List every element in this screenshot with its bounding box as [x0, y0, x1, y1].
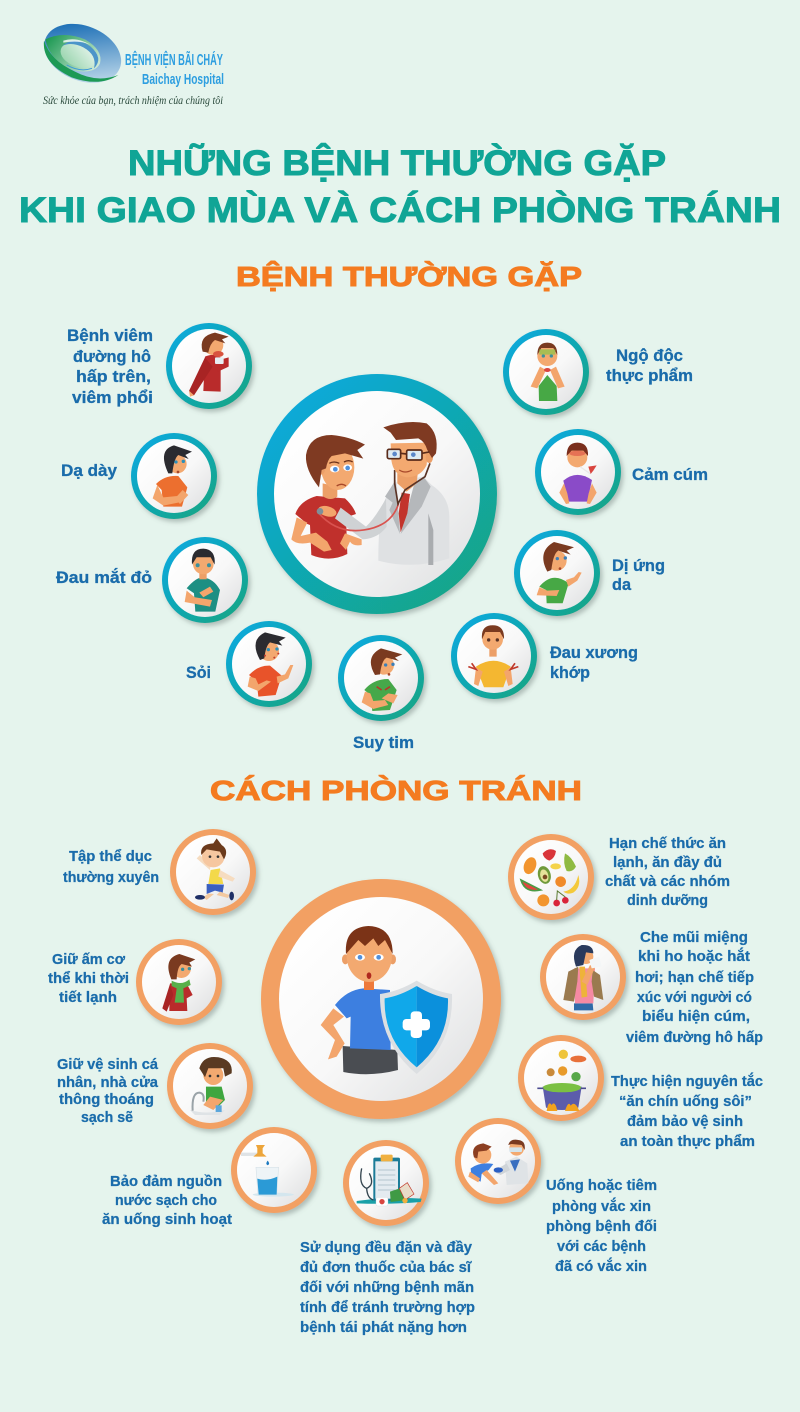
badge: heart failure — [338, 635, 424, 721]
label: vaccination: với các bệnh — [557, 1238, 646, 1255]
label: clean water: Bảo đảm nguồn — [110, 1173, 222, 1190]
label: cooked food: an toàn thực phẩm — [620, 1133, 755, 1150]
label: joint pain — [550, 643, 638, 682]
label: respiratory infection: viêm phổi — [72, 388, 153, 407]
label: healthy food: dinh dưỡng — [627, 892, 708, 909]
label: flu: Cảm cúm — [632, 465, 708, 484]
label: hygiene — [57, 1056, 159, 1126]
label: hygiene: sạch sẽ — [81, 1109, 133, 1126]
label: keep warm: tiết lạnh — [59, 989, 117, 1006]
label: cover mouth: viêm đường hô hấp — [626, 1029, 763, 1046]
label: skin allergy: Dị ứng — [612, 556, 665, 575]
label: food poisoning: thực phẩm — [606, 366, 693, 385]
central badge: doctor examining patient — [257, 374, 497, 614]
label: medication: bệnh tái phát nặng hơn — [300, 1319, 467, 1336]
label: respiratory infection — [67, 326, 153, 407]
label: vaccination: phòng vắc xin — [552, 1197, 651, 1215]
label: clean water: nước sạch cho — [115, 1192, 217, 1209]
label: exercise: Tập thể dục — [69, 848, 152, 865]
label: medication — [300, 1239, 475, 1336]
label: skin allergy — [612, 556, 665, 594]
label: healthy food: Hạn chế thức ăn — [609, 835, 726, 852]
label: cover mouth — [626, 929, 763, 1046]
badge: joint pain — [451, 613, 537, 699]
logo name: BỆNH VIỆN BÃI CHÁY — [125, 51, 223, 69]
label: joint pain: Đau xương — [550, 643, 638, 662]
badge: cover mouth — [540, 934, 626, 1020]
badge: respiratory infection — [166, 323, 252, 409]
badge: healthy food — [508, 834, 594, 920]
label: exercise: thường xuyên — [63, 869, 159, 886]
title: KHI GIAO MÙA VÀ CÁCH PHÒNG TRÁNH — [19, 190, 781, 230]
label: cooked food: đảm bảo vệ sinh — [627, 1113, 743, 1130]
badge: skin allergy — [514, 530, 600, 616]
badge: hygiene — [167, 1043, 253, 1129]
title: NHỮNG BỆNH THƯỜNG GẶP — [128, 143, 666, 183]
label: vaccination — [546, 1177, 657, 1275]
icon: hospital emblem — [35, 13, 130, 94]
heading: prevention: CÁCH PHÒNG TRÁNH — [210, 775, 582, 806]
label: skin allergy: da — [612, 575, 632, 594]
label: healthy food: chất và các nhóm — [605, 873, 730, 890]
label: hygiene: thông thoáng — [59, 1091, 154, 1108]
logo english name: Baichay Hospital — [142, 72, 224, 88]
badge: medication — [343, 1140, 429, 1226]
label: vaccination: phòng bệnh đối — [546, 1218, 657, 1235]
label: cover mouth: xúc với người có — [637, 989, 752, 1006]
label: food poisoning — [606, 346, 693, 385]
label: keep warm: Giữ ấm cơ — [52, 951, 125, 968]
label: medication: đối với những bệnh mãn — [300, 1279, 474, 1296]
label: vaccination: đã có vắc xin — [555, 1257, 647, 1275]
label: hygiene: nhân, nhà cửa — [57, 1074, 159, 1091]
label: cover mouth: Che mũi miệng — [640, 929, 748, 946]
badge: flu — [535, 429, 621, 515]
label: stomach: Dạ dày — [61, 461, 118, 480]
label: vaccination: Uống hoặc tiêm — [546, 1177, 657, 1194]
panel: prevention — [48, 775, 763, 1336]
panel: common diseases — [56, 261, 708, 752]
label: medication: Sử dụng đều đặn và đầy — [300, 1239, 473, 1256]
badge: clean water — [231, 1127, 317, 1213]
label: food poisoning: Ngộ độc — [616, 346, 683, 365]
badge: exercise — [170, 829, 256, 915]
label: cover mouth: biểu hiện cúm, — [642, 1008, 750, 1025]
badge: stomach — [131, 433, 217, 519]
label: clean water: ăn uống sinh hoạt — [102, 1211, 232, 1228]
label: joint pain: khớp — [550, 663, 590, 682]
badge: vaccination — [455, 1118, 541, 1204]
badge: keep warm — [136, 939, 222, 1025]
title — [19, 143, 781, 230]
label: medication: tính để tránh trường hợp — [300, 1299, 475, 1316]
label: cover mouth: hơi; hạn chế tiếp — [635, 969, 754, 986]
label: keep warm: thể khi thời — [48, 970, 129, 987]
badge: measles — [226, 621, 312, 707]
label: respiratory infection: Bệnh viêm — [67, 326, 153, 345]
label: keep warm — [48, 951, 129, 1006]
label: respiratory infection: hấp trên, — [76, 367, 151, 386]
label: cooked food — [611, 1072, 763, 1150]
heading: common diseases: BỆNH THƯỜNG GẶP — [236, 261, 582, 292]
label: cooked food: “ăn chín uống sôi” — [619, 1093, 752, 1110]
label: healthy food — [605, 835, 730, 909]
label: medication: đủ đơn thuốc của bác sĩ — [300, 1259, 472, 1276]
badge: pink eye — [162, 537, 248, 623]
label: respiratory infection: đường hô — [73, 347, 151, 366]
label: measles: Sỏi — [186, 663, 211, 682]
label: exercise — [63, 848, 159, 886]
label: clean water — [102, 1173, 232, 1228]
label: cover mouth: khi ho hoặc hắt — [638, 947, 750, 965]
logo: Bai Chay Hospital — [35, 13, 224, 107]
label: pink eye: Đau mắt đỏ — [56, 568, 152, 587]
label: heart failure: Suy tim — [353, 733, 414, 752]
label: healthy food: lạnh, ăn đầy đủ — [613, 854, 722, 871]
label: cooked food: Thực hiện nguyên tắc — [611, 1072, 763, 1090]
logo tagline: Sức khỏe của bạn, trách nhiệm của chúng tôi — [43, 95, 223, 107]
badge: food poisoning — [503, 329, 589, 415]
central badge: person with shield — [261, 879, 501, 1119]
label: hygiene: Giữ vệ sinh cá — [57, 1056, 159, 1073]
badge: cooked food — [518, 1035, 604, 1121]
